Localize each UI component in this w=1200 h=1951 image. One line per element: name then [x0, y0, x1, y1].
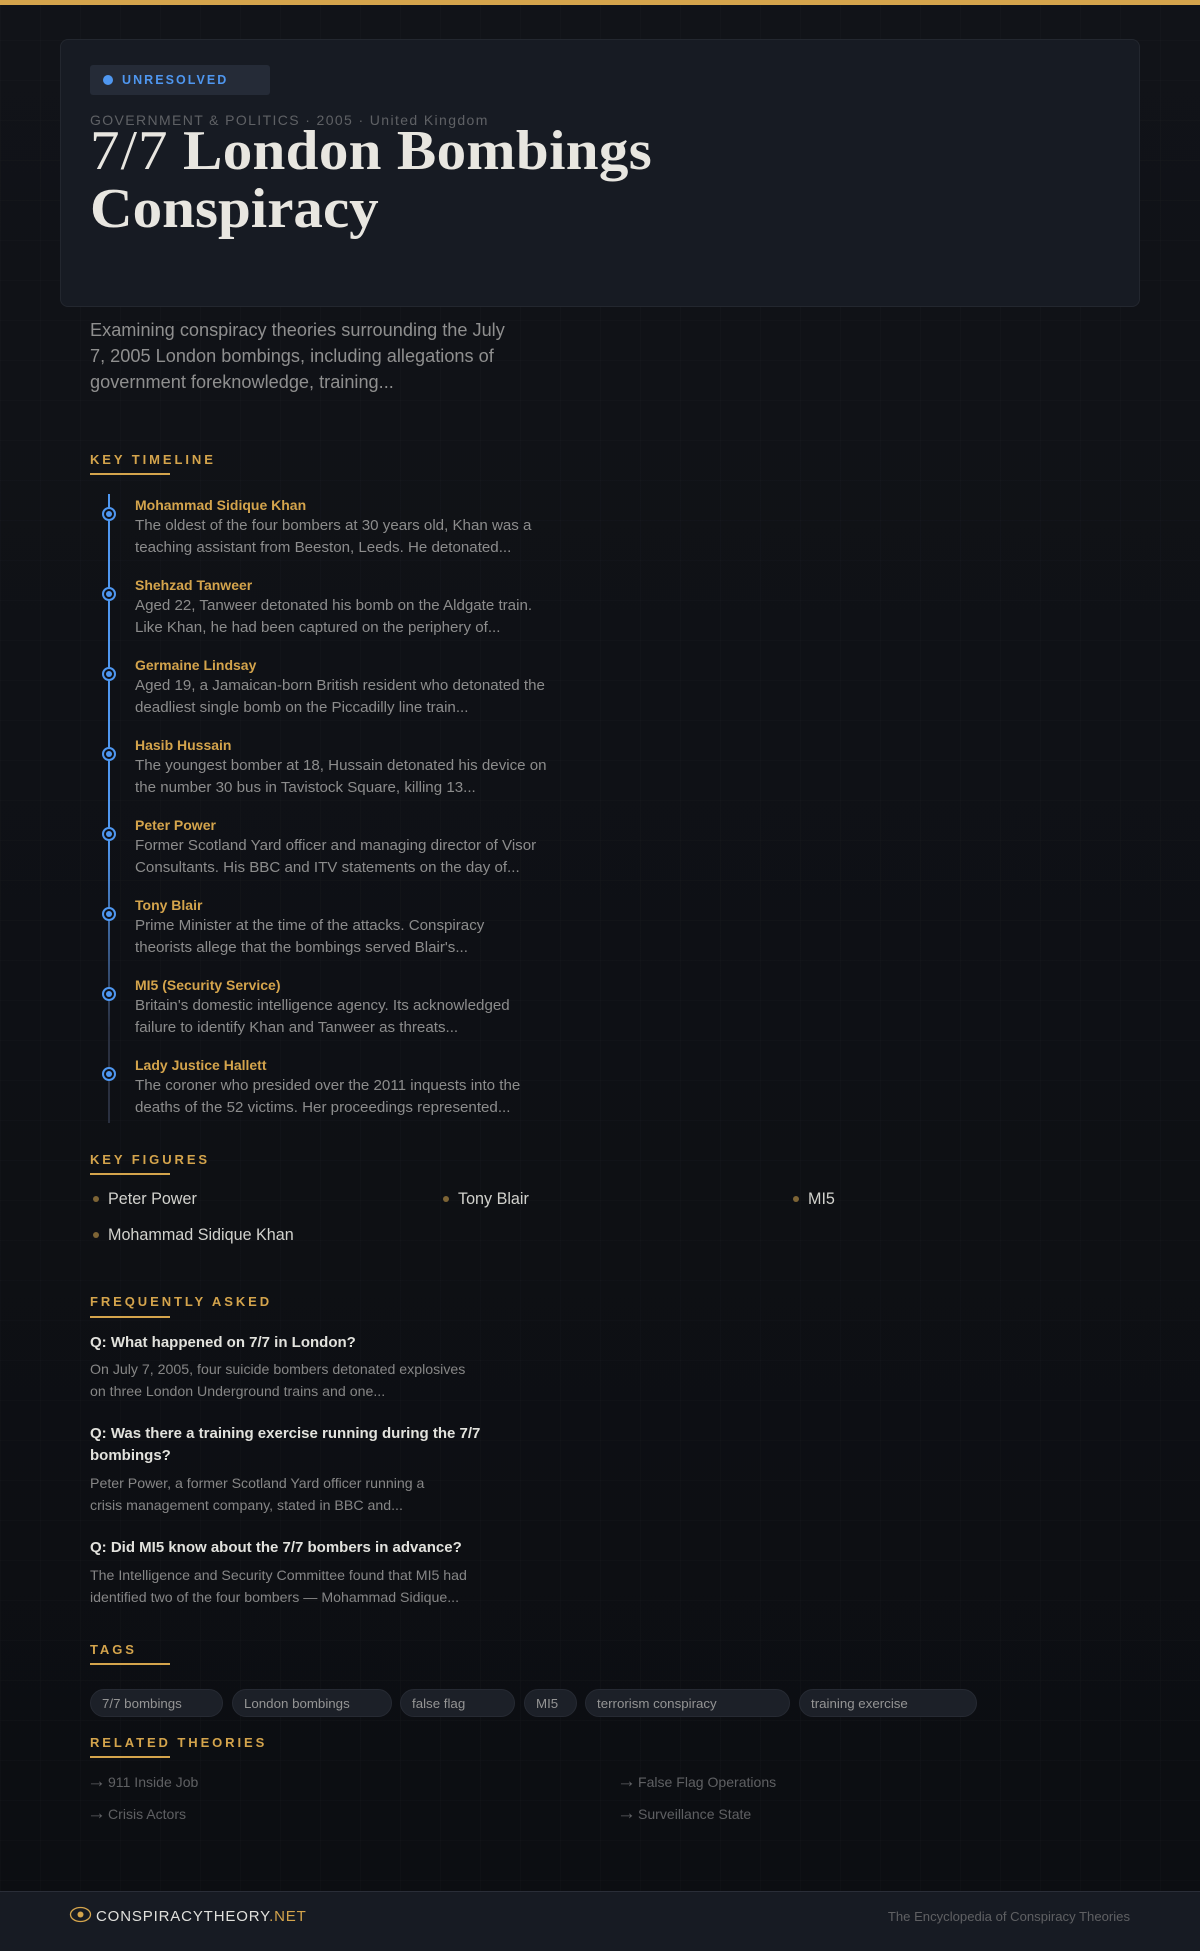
related link: Crisis Actors: →: [87, 1803, 106, 1824]
answer 2: crisis management company, stated in BBC and...: [90, 1498, 403, 1514]
footer tagline: The Encyclopedia of Conspiracy Theories: [888, 1909, 1130, 1924]
tag list: terrorism conspiracy: [597, 1696, 717, 1711]
heading: key timeline: KEY TIMELINE: [90, 452, 216, 467]
related link: Surveillance State: →: [617, 1803, 636, 1824]
answer 3: The Intelligence and Security Committee found that MI5 had: [90, 1568, 467, 1584]
timeline entry: Tony Blair: [102, 897, 484, 956]
answer 3: identified two of the four bombers — Mohammad Sidique...: [90, 1590, 459, 1606]
panel: related theories: [87, 1735, 776, 1824]
timeline entry: Shehzad Tanweer: Aged 22, Tanweer detonated his bomb on the Aldgate train.: [135, 597, 532, 614]
timeline entry: Germaine Lindsay: [102, 657, 545, 716]
timeline entry: Mohammad Sidique Khan: Mohammad Sidique Khan: [135, 497, 306, 513]
figure: Mohammad Sidique Khan: Mohammad Sidique Khan: [108, 1226, 294, 1244]
heading: key figures: KEY FIGURES: [90, 1152, 210, 1167]
title: [90, 120, 652, 240]
tag list: false flag: [412, 1696, 465, 1711]
timeline entry: Shehzad Tanweer: Shehzad Tanweer: [135, 577, 252, 593]
figure: MI5: [793, 1190, 835, 1208]
timeline entry: MI5: failure to identify Khan and Tanweer as threats...: [135, 1019, 458, 1036]
summary text: Examining conspiracy theories surrounding the July: [90, 320, 505, 340]
timeline entry: Shehzad Tanweer: [102, 577, 532, 636]
badge label: UNRESOLVED: [122, 73, 228, 87]
timeline entry: Peter Power: Peter Power: [135, 817, 216, 833]
heading: frequently asked: FREQUENTLY ASKED: [90, 1294, 272, 1309]
answer 3: [90, 1568, 467, 1606]
title: Conspiracy: [90, 178, 379, 240]
answer 1: [90, 1362, 465, 1400]
tag list: training exercise: [811, 1696, 908, 1711]
timeline entry: Hasib Hussain: the number 30 bus in Tavistock Square, killing 13...: [135, 779, 476, 796]
timeline entry: Mohammad Sidique Khan: [102, 497, 532, 556]
timeline entry: Tony Blair: Prime Minister at the time of the attacks. Conspiracy: [135, 917, 484, 934]
summary text: [90, 320, 505, 392]
timeline entry: Tony Blair: theorists allege that the bombings served Blair's...: [135, 939, 468, 956]
timeline entry: Mohammad Sidique Khan: The oldest of the four bombers at 30 years old, Khan was a: [135, 517, 531, 534]
footer: [0, 1891, 1200, 1951]
related link: 911 Inside Job: [87, 1771, 198, 1792]
timeline entry: Germaine Lindsay: deadliest single bomb on the Piccadilly line train...: [135, 699, 468, 716]
summary text: government foreknowledge, training...: [90, 372, 394, 392]
tag list: MI5: [536, 1696, 558, 1711]
timeline entry: Germaine Lindsay: Aged 19, a Jamaican-born British resident who detonated the: [135, 677, 545, 694]
related link: Crisis Actors: Crisis Actors: [108, 1806, 186, 1822]
related link: False Flag Operations: False Flag Operations: [638, 1774, 776, 1790]
timeline entry: Peter Power: [102, 817, 536, 876]
answer 2: Peter Power, a former Scotland Yard officer running a: [90, 1476, 424, 1492]
status badge: unresolved: [90, 65, 270, 95]
timeline entry: Lady Justice Hallett: Lady Justice Hallett: [135, 1057, 266, 1073]
heading: tags: TAGS: [90, 1642, 137, 1657]
timeline entry: Lady Justice Hallett: [102, 1057, 520, 1116]
logo wordmark: CONSPIRACYTHEORY.NET: [96, 1908, 307, 1925]
answer 1: On July 7, 2005, four suicide bombers detonated explosives: [90, 1362, 465, 1378]
icon: eye logo: [70, 1906, 92, 1922]
icon: status dot: [103, 75, 113, 85]
title: London Bombings: [183, 120, 652, 182]
figure: MI5: MI5: [808, 1190, 835, 1208]
timeline entry: Lady Justice Hallett: deaths of the 52 victims. Her proceedings represented...: [135, 1099, 510, 1116]
related link: Crisis Actors: [87, 1803, 186, 1824]
meta line: GOVERNMENT & POLITICS · 2005 · United Kingdom: [90, 112, 489, 128]
panel: tags: [90, 1642, 977, 1717]
tag list: 7/7 bombings: [102, 1696, 182, 1711]
panel: header card: [60, 39, 1140, 307]
answer 1: on three London Underground trains and one...: [90, 1384, 385, 1400]
timeline entry: Mohammad Sidique Khan: teaching assistant from Beeston, Leeds. He detonated...: [135, 539, 511, 556]
timeline entry: Peter Power: Consultants. His BBC and ITV statements on the day of...: [135, 859, 520, 876]
panel: frequently asked: [90, 1294, 480, 1606]
question 3: Q: Did MI5 know about the 7/7 bombers in advance?: [90, 1539, 462, 1556]
timeline entry: MI5: MI5 (Security Service): [135, 977, 281, 993]
related link: 911 Inside Job: →: [87, 1771, 106, 1792]
summary text: 7, 2005 London bombings, including allegations of: [90, 346, 494, 366]
related link: Surveillance State: [617, 1803, 751, 1824]
related link: 911 Inside Job: 911 Inside Job: [108, 1774, 198, 1790]
timeline entry: MI5: Britain's domestic intelligence agency. Its acknowledged: [135, 997, 510, 1014]
panel: key timeline: [90, 452, 547, 1123]
timeline entry: Tony Blair: Tony Blair: [135, 897, 202, 913]
tag list: [90, 1689, 977, 1717]
timeline entry: Lady Justice Hallett: The coroner who presided over the 2011 inquests into the: [135, 1077, 520, 1094]
title: 7/7: [90, 120, 169, 182]
figure: Peter Power: Peter Power: [108, 1190, 197, 1208]
figure: Tony Blair: Tony Blair: [458, 1190, 529, 1208]
top accent bar: [0, 0, 1200, 5]
question 1: Q: What happened on 7/7 in London?: [90, 1334, 356, 1351]
question 2: Q: Was there a training exercise running during the 7/7: [90, 1425, 480, 1442]
timeline entry: Hasib Hussain: Hasib Hussain: [135, 737, 231, 753]
related link: Surveillance State: Surveillance State: [638, 1806, 751, 1822]
timeline entry: Peter Power: Former Scotland Yard officer and managing director of Visor: [135, 837, 536, 854]
timeline entry: Shehzad Tanweer: Like Khan, he had been captured on the periphery of...: [135, 619, 500, 636]
answer 2: [90, 1476, 424, 1514]
timeline entry: Hasib Hussain: The youngest bomber at 18, Hussain detonated his device on: [135, 757, 547, 774]
timeline entry: Hasib Hussain: [102, 737, 547, 796]
question 2: bombings?: [90, 1447, 171, 1464]
panel: key figures: [90, 1152, 835, 1244]
question 2: [90, 1425, 480, 1464]
timeline entry: MI5: [102, 977, 510, 1036]
tag list: London bombings: [244, 1696, 350, 1711]
timeline entry: Germaine Lindsay: Germaine Lindsay: [135, 657, 256, 673]
related link: False Flag Operations: [617, 1771, 776, 1792]
related link: False Flag Operations: →: [617, 1771, 636, 1792]
heading: related theories: RELATED THEORIES: [90, 1735, 267, 1750]
timeline line: [108, 494, 110, 1123]
